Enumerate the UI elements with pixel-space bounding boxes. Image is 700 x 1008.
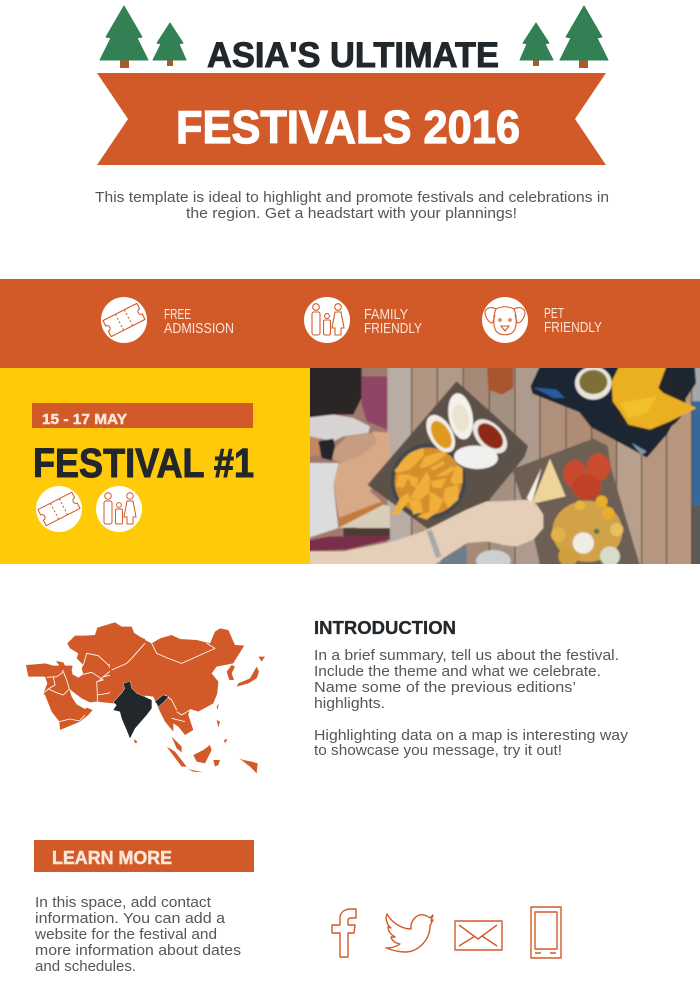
ribbon banner — [97, 73, 606, 165]
label: pet friendly: PET — [544, 305, 564, 322]
map: east Asia — [110, 623, 265, 773]
festival heading: FESTIVAL #1 — [33, 440, 254, 486]
intro paragraphs: highlights. — [314, 695, 385, 712]
contact text: information. You can add a — [35, 910, 226, 927]
icon: trees right — [520, 6, 608, 68]
icon: ticket — [101, 297, 147, 343]
icon: family — [304, 297, 350, 343]
icon: ticket small — [36, 486, 82, 532]
contact text: and schedules. — [35, 958, 136, 975]
label: family friendly: FRIENDLY — [364, 320, 422, 337]
intro text — [95, 189, 609, 222]
contact text: In this space, add contact — [35, 894, 212, 911]
icon: twitter — [386, 914, 433, 952]
header — [95, 6, 609, 222]
icon: facebook — [332, 909, 356, 957]
intro paragraphs: Name some of the previous editions’ — [314, 679, 576, 696]
intro paragraphs: Highlighting data on a map is interesting way — [314, 727, 629, 744]
intro paragraphs — [314, 647, 629, 759]
label: family friendly — [364, 306, 422, 337]
label: pet friendly — [544, 305, 602, 336]
label: family friendly: FAMILY — [364, 306, 408, 323]
photo: food on wooden table — [310, 368, 700, 564]
date bar — [32, 403, 253, 428]
icon: dog — [482, 297, 528, 343]
title line one: ASIA'S ULTIMATE — [207, 36, 499, 75]
contact text: website for the festival and — [34, 926, 217, 943]
panel: festival card — [0, 368, 311, 564]
label: pet friendly: FRIENDLY — [544, 319, 602, 336]
intro paragraphs: In a brief summary, tell us about the festival. — [314, 647, 619, 664]
contact text — [34, 894, 241, 975]
label: free admission — [164, 306, 234, 337]
label: free admission: FREE — [164, 306, 191, 323]
introduction text block — [314, 618, 629, 759]
social icons — [332, 907, 561, 958]
icon: envelope — [455, 921, 502, 950]
intro paragraphs: to showcase you message, try it out! — [314, 742, 562, 759]
date bar: 15 - 17 MAY — [42, 411, 127, 428]
icon: trees left — [100, 6, 186, 68]
intro text: This template is ideal to highlight and promote festivals and celebrations in — [95, 189, 609, 206]
learn more section — [34, 840, 254, 975]
label: free admission: ADMISSION — [164, 320, 234, 337]
title line two: FESTIVALS 2016 — [176, 101, 520, 153]
map: India highlighted — [113, 682, 168, 738]
chart: map of Asia with India highlighted — [26, 622, 265, 773]
icon: family small — [96, 486, 142, 532]
map: west Asia — [26, 622, 145, 730]
intro paragraphs: Include the theme and what we celebrate. — [314, 663, 601, 680]
contact text: more information about dates — [35, 942, 241, 959]
heading: introduction: INTRODUCTION — [314, 618, 456, 638]
learn more bar: LEARN MORE — [52, 848, 172, 868]
panel: legend band — [0, 279, 700, 368]
icon: phone — [531, 907, 561, 958]
learn more bar — [34, 840, 254, 872]
intro text: the region. Get a headstart with your plannings! — [186, 205, 517, 222]
